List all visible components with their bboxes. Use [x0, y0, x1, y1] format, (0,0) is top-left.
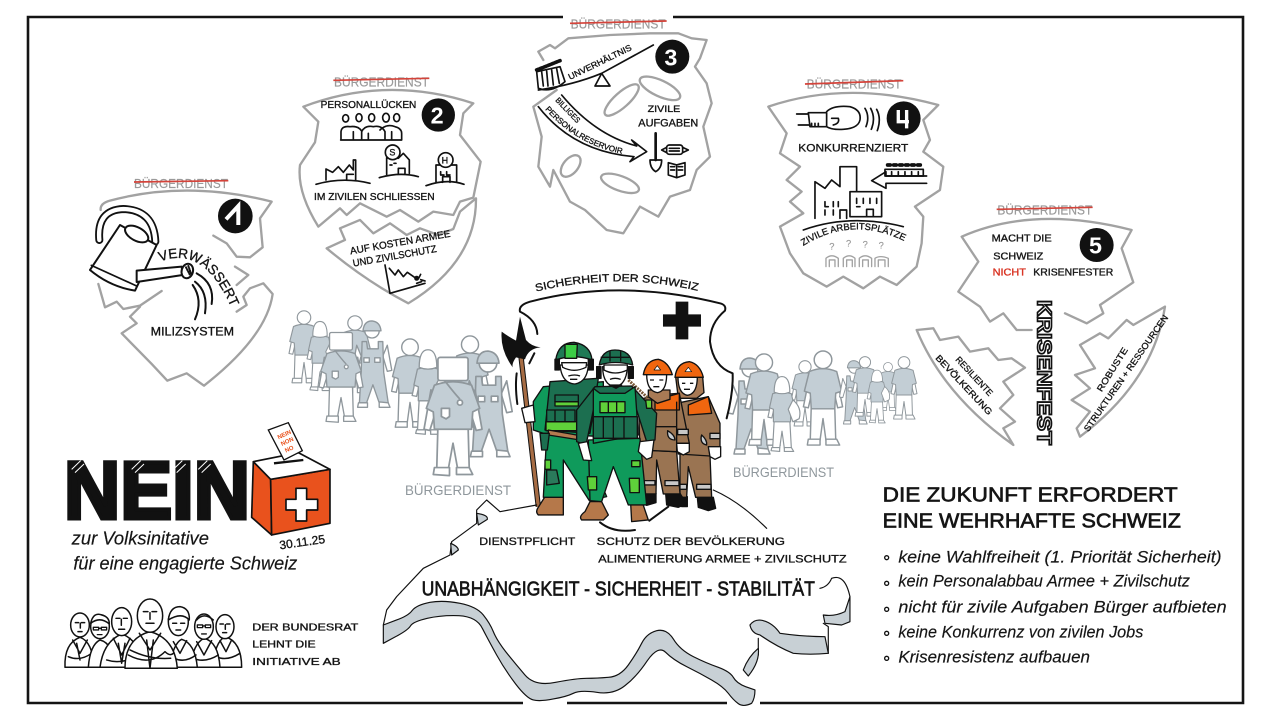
heading: bürgerdienst crossed out: BÜRGERDIENST — [997, 202, 1092, 217]
list items: nicht für zivile Aufgaben Bürger aufbieten — [898, 598, 1227, 617]
question marks: ? — [829, 241, 835, 251]
arrow and people — [872, 165, 927, 188]
text: unverhältnis: UNVERHÄLTNIS — [566, 42, 633, 82]
text: milizsystem: MILIZSYSTEM — [151, 324, 234, 338]
subtitle — [71, 528, 298, 573]
text: resiliente bevölkerung: BEVÖLKERUNG — [934, 353, 994, 417]
shield outline — [98, 191, 273, 386]
panel: nein block — [64, 423, 358, 668]
text: robuste strukturen + ressourcen: STRUKTUREN + RESSOURCEN — [1082, 313, 1170, 433]
list bullets — [885, 556, 889, 660]
subtitle: für eine engagierte Schweiz — [73, 552, 298, 573]
panel: shield 4 konkurrenziert — [767, 76, 944, 290]
panel: central shield and personnel — [501, 274, 734, 522]
heading: EINE WEHRHAFTE SCHWEIZ — [883, 509, 1181, 532]
icon: factory — [803, 167, 903, 230]
chart: falling line — [385, 265, 425, 293]
panel: shield 3 unverhältnis — [532, 16, 713, 234]
question marks: ? — [879, 241, 884, 251]
heading: DIE ZUKUNFT ERFORDERT — [883, 484, 1178, 507]
list items: keine Wahlfreiheit (1. Priorität Sicherheit) — [898, 547, 1222, 566]
heading: bürgerdienst crossed out: BÜRGERDIENST — [571, 16, 666, 31]
text: schutz der bevölkerung: SCHUTZ DER BEVÖLKERUNG — [597, 536, 785, 548]
text: zivile aufgaben: ZIVILE — [648, 104, 680, 114]
label: bürgerdienst right: BÜRGERDIENST — [733, 463, 834, 480]
text: macht die schweiz nicht krisenfester: MACHT DIE — [992, 234, 1052, 245]
icon: unknown workers — [826, 256, 888, 267]
icon: watering can — [90, 209, 212, 319]
country outline — [383, 490, 850, 655]
number badge 3 — [655, 40, 689, 74]
text: der bundesrat lehnt die initiative ab: LEHNT DIE — [252, 640, 316, 651]
shield outline — [768, 93, 943, 288]
rope between figures — [628, 380, 648, 398]
heading: bürgerdienst crossed out: BÜRGERDIENST — [807, 76, 902, 91]
alpine border band — [383, 513, 850, 705]
list items: keine Konkurrenz von zivilen Jobs — [898, 623, 1143, 642]
panel: shield 2 personallücken — [300, 75, 481, 303]
highlights on letters — [72, 461, 211, 473]
text: billiges personalreservoir: BILLIGES — [554, 96, 582, 125]
shield outline — [533, 33, 712, 233]
number badge 5 — [1080, 228, 1114, 262]
ballot box — [252, 453, 330, 535]
icon: seesaw — [537, 45, 653, 90]
panel: future text — [883, 484, 1227, 666]
panel: shield 1 verwässert — [89, 176, 274, 387]
text: verwässert: VERWÄSSERT — [157, 248, 240, 304]
arrow: personalreservoir — [538, 95, 647, 162]
heading: bürgerdienst crossed out: BÜRGERDIENST — [334, 75, 429, 90]
text: der bundesrat lehnt die initiative ab: INITIATIVE AB — [252, 657, 341, 668]
text: macht die schweiz nicht krisenfester: NICHT — [993, 268, 1026, 279]
shield outline — [917, 219, 1165, 445]
text: dienstpflicht: DIENSTPFLICHT — [479, 536, 576, 548]
list items: kein Personalabbau Armee + Zivilschutz — [898, 572, 1191, 591]
text: der bundesrat lehnt die initiative ab — [252, 623, 358, 668]
text: auf kosten armee und zivilschutz — [349, 229, 452, 270]
icon: row of people — [341, 113, 402, 140]
map of Switzerland — [383, 490, 850, 705]
heading: bürgerdienst crossed out: BÜRGERDIENST — [134, 176, 228, 191]
text: unabhängigkeit sicherheit stabilität: UNABHÄNGIGKEIT - SICHERHEIT - STABILITÄT — [422, 577, 815, 600]
ballot paper: NEIN — [277, 430, 292, 441]
text: macht die schweiz nicht krisenfester — [992, 234, 1113, 279]
text: personallücken: PERSONALLÜCKEN — [321, 99, 416, 111]
grey crowd: left — [289, 311, 512, 476]
text: im zivilen schliessen: IM ZIVILEN SCHLIESSEN — [314, 192, 435, 203]
heading: sicherheit der schweiz: SICHERHEIT DER SCHWEIZ — [536, 274, 699, 292]
text: zivile aufgaben — [638, 104, 698, 129]
icon: factory, bank, hospital: H — [442, 155, 448, 165]
number badge 1 — [218, 199, 253, 233]
icon: halberd — [501, 317, 541, 507]
panel: shield 5 krisenfest — [917, 202, 1170, 445]
icon: federal council portraits — [65, 599, 242, 668]
text: robuste strukturen + ressourcen: ROBUSTE — [1095, 346, 1130, 393]
text: konkurrenziert: KONKURRENZIERT — [798, 143, 908, 155]
text: auf kosten armee und zivilschutz: AUF KOSTEN ARMEE — [349, 229, 452, 257]
accent strokes — [600, 507, 668, 531]
question marks — [829, 239, 884, 251]
list items: Krisenresistenz aufbauen — [898, 647, 1090, 666]
soldier 2 — [577, 350, 657, 522]
number badge 2: 2 — [431, 102, 444, 128]
icon: factory, bank, hospital: S — [389, 148, 395, 158]
firefighter 4 — [675, 362, 721, 511]
shield outline — [300, 90, 481, 303]
icon: shovel, mask, book — [650, 133, 688, 178]
icon: boxing glove — [797, 106, 879, 131]
list items — [898, 547, 1227, 666]
text: resiliente bevölkerung: RESILIENTE — [954, 355, 995, 398]
text: macht die schweiz nicht krisenfester: SCHWEIZ — [993, 251, 1043, 262]
text: alimentierung armee + zivilschutz: ALIMENTIERUNG ARMEE + ZIVILSCHUTZ — [598, 554, 847, 566]
heading — [883, 484, 1181, 532]
subtitle: zur Volksinitative — [71, 528, 209, 549]
icon: factory, bank, hospital — [316, 145, 464, 186]
number badge 4 — [887, 101, 921, 135]
text: der bundesrat lehnt die initiative ab: DER BUNDESRAT — [252, 623, 358, 634]
number badge 2 — [422, 98, 455, 132]
heading: nein: NEIN — [64, 445, 250, 536]
firefighter 3 — [638, 359, 689, 507]
text: billiges personalreservoir: PERSONALRESERVOIR — [545, 106, 622, 154]
question marks: ? — [846, 239, 851, 249]
icon: swiss cross — [663, 302, 701, 339]
question marks: ? — [863, 239, 868, 249]
shield outline black — [516, 290, 733, 418]
text: macht die schweiz nicht krisenfester: KRISENFESTER — [1033, 268, 1113, 279]
ballot paper: NO — [284, 445, 295, 454]
number badge 3: 3 — [664, 44, 677, 70]
grey crowd: right — [728, 351, 917, 454]
label: bürgerdienst left: BÜRGERDIENST — [405, 481, 511, 498]
date: 30.11.25 — [278, 532, 326, 552]
text: zivile arbeitsplätze: ZIVILE ARBEITSPLÄTZE — [800, 222, 906, 246]
text: auf kosten armee und zivilschutz: UND ZIVILSCHUTZ — [352, 244, 438, 270]
soldier 1 — [522, 342, 607, 515]
number badge 5: 5 — [1089, 233, 1102, 259]
text: krisenfest: KRISENFEST — [1033, 300, 1056, 445]
ballot paper: NON — [280, 437, 295, 448]
ballot paper — [268, 423, 302, 460]
text: zivile aufgaben: AUFGABEN — [638, 117, 698, 129]
